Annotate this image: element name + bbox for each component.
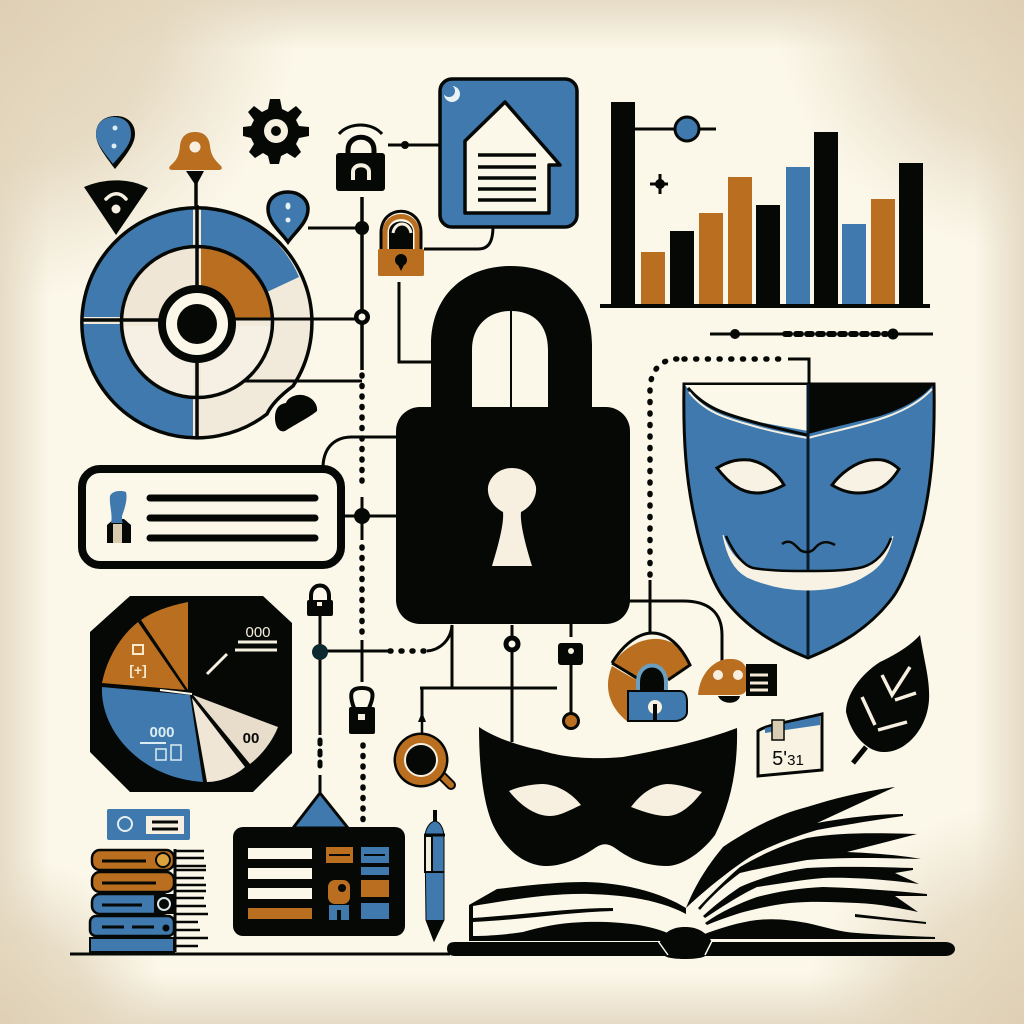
icon: leaf — [846, 635, 929, 763]
chart: pie chart in black octagon: 000 — [149, 724, 175, 741]
chart: pie chart in black octagon — [90, 596, 292, 792]
icon: keyhole lock mid — [349, 688, 375, 734]
icon: pen — [424, 810, 445, 941]
icon: orange bell pin — [169, 132, 222, 206]
icon: orange gear with magnifier — [394, 712, 451, 788]
node dots on the vertical connector — [354, 221, 370, 524]
icon: small lock top of left line — [307, 586, 333, 616]
slider nodes under the chart — [730, 328, 898, 340]
icon: small wifi padlock — [336, 125, 409, 191]
baseline — [70, 952, 450, 956]
icon: black eye mask — [479, 727, 737, 866]
icon: open book — [447, 787, 955, 959]
dot: centre node — [506, 638, 518, 650]
icon: black cloud blob — [275, 395, 317, 431]
chart: pie chart in black octagon: 00 — [243, 730, 259, 747]
icon: orange chat tag — [698, 659, 777, 703]
icon: blue location pin top-left — [96, 116, 135, 169]
chart: concentric donut — [82, 205, 312, 438]
node dot on left line — [312, 644, 328, 660]
icon: small padlock above dot — [558, 643, 583, 665]
chart: bar chart — [600, 102, 930, 308]
chart: pie chart in black octagon: [+] — [129, 662, 147, 678]
icon: orange radar with blue padlock — [608, 633, 690, 722]
chart: pie chart in black octagon: 000 — [245, 624, 271, 641]
icon: small orange padlock — [378, 211, 424, 276]
icon: blue house card — [440, 79, 577, 227]
icon: large black padlock — [396, 266, 630, 624]
icon: dashboard card with tag — [233, 793, 405, 936]
icon: person text card — [82, 469, 341, 565]
icon: black wifi triangle — [84, 180, 148, 235]
icon: stack of books — [90, 849, 208, 952]
connector lines — [235, 129, 933, 826]
icon: gear — [243, 99, 309, 164]
icon: theater mask blue — [684, 384, 934, 658]
dot: orange terminal node — [564, 714, 578, 728]
icon: blue note tag — [107, 809, 190, 840]
icon: calendar: 5'31 — [772, 748, 804, 770]
icon: blue location pin right — [268, 192, 308, 242]
icon: calendar — [758, 714, 822, 776]
